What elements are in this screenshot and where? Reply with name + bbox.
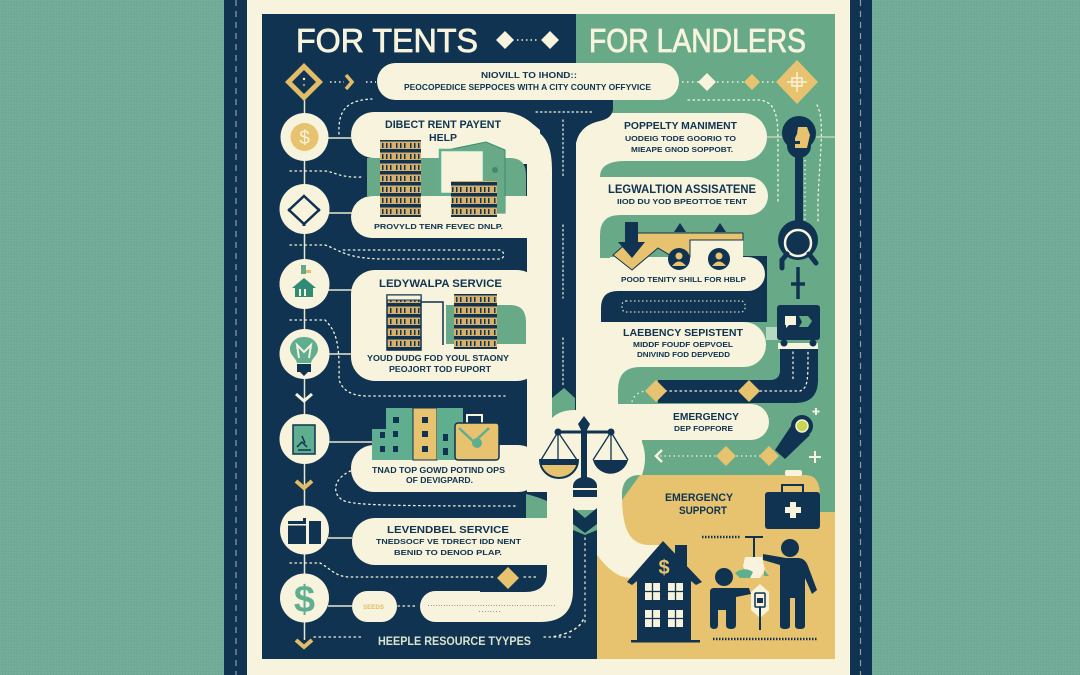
icon: aid handover <box>735 537 769 578</box>
gold zigzag <box>613 233 743 270</box>
icon: green house <box>280 259 330 309</box>
card: direct rent payment help: HELP <box>429 132 457 144</box>
banner: intro: PEOCOPEDICE SEPPOCES WITH A CITY COUNTY OFFYVICE <box>404 82 651 92</box>
icon: green dollar <box>280 574 329 622</box>
heading: for tenants: FOR TENTS <box>296 22 478 59</box>
card: tenant guidance text: TNAD TOP GOWD POTIND OPS <box>372 466 506 475</box>
coin stack right <box>454 294 497 349</box>
banner: intro: NIOVILL TO IHOND:: <box>481 71 577 80</box>
dotted rails <box>688 100 821 222</box>
heading: emergency support: EMERGENCY <box>665 492 734 504</box>
stack connector <box>421 302 443 345</box>
illustration lower pill <box>353 196 527 238</box>
arrow: top chevron with dots <box>330 75 376 89</box>
card: legal aid service: PEOJORT TOD FUPORT <box>389 365 491 374</box>
illustration: buildings and briefcase <box>372 408 499 460</box>
heading: for landlords: FOR LANDLERS <box>589 22 806 59</box>
icon: dollar coin <box>280 113 328 161</box>
timeline spine <box>304 100 306 640</box>
dotted frame in navy band <box>622 301 745 312</box>
center arrow second <box>552 208 576 305</box>
coin stack left <box>387 295 421 350</box>
panel: for tenants <box>262 14 576 659</box>
card: legal aid service <box>367 278 526 374</box>
arrow down <box>618 222 645 258</box>
cross pin <box>791 267 805 299</box>
magnifier icon <box>778 220 818 268</box>
card: agency assistant <box>623 327 744 359</box>
icon: diamond frame <box>280 184 330 234</box>
card: direct rent payment help: PROVYLD TENR FEVEC DNLP. <box>374 222 503 231</box>
right navy border strip <box>850 0 872 675</box>
icon: sparkles <box>809 408 821 463</box>
arrow: dotted left with diamonds <box>656 446 779 466</box>
heading: emergency support: SUPPORT <box>679 505 727 517</box>
card: property management <box>624 120 738 154</box>
card: property management: POPPELTY MANIMENT <box>624 120 738 132</box>
icon: gold diamond badge <box>285 63 323 101</box>
card: tenant help illustration: POOD TENITY SHILL FOR HBLP <box>621 275 746 284</box>
landlord icon tower <box>688 100 835 340</box>
pockets between roads <box>400 161 770 592</box>
people badges <box>668 248 730 270</box>
pill base <box>610 257 765 291</box>
arrow: cream chevron <box>296 394 312 401</box>
arrow: gold chevron one <box>296 481 312 488</box>
card: emergency <box>673 411 739 433</box>
scales of justice <box>540 416 628 497</box>
illustration green backing <box>367 158 526 202</box>
icon: light bulb <box>280 329 330 379</box>
card: legal aid level service <box>376 524 521 557</box>
chat box icon <box>777 305 820 340</box>
icon: house: $ <box>658 557 670 579</box>
card: legal aid level service: LEVENDBEL SERVICE <box>387 524 509 536</box>
center dotted guide lines <box>536 112 592 385</box>
icon: key tag <box>775 415 813 459</box>
card: property management: MIEAPE GNOD SOPPOBT. <box>631 145 733 154</box>
card: agency assistant: MIDDF FOUDF OEPVOEL <box>633 340 733 349</box>
panel: for landlords <box>576 14 835 659</box>
card: direct rent payment help: DIBECT RENT PAYENT <box>385 119 501 131</box>
coin stack short <box>451 181 497 217</box>
long pill text: ........ <box>479 608 500 613</box>
arrow: gold chevron two <box>296 640 312 647</box>
card: agency assistant: LAEBENCY SEPISTENT <box>623 327 744 339</box>
coin stack tall <box>380 140 421 217</box>
cream cut-out <box>690 240 743 258</box>
icon: folder <box>280 506 329 554</box>
card: emergency: DEP FOPFORE <box>674 424 733 433</box>
card: tenant help illustration <box>610 222 765 291</box>
left dotted paths <box>290 99 572 637</box>
navy road <box>632 340 818 403</box>
center arrow top <box>520 100 613 188</box>
card: legislation assistance: IIOD DU YOD BPEOTTOE TENT <box>617 197 747 206</box>
landlord top diamonds <box>682 60 818 104</box>
panel: emergency gold area <box>597 475 835 659</box>
card: legal aid service: YOUD DUDG FOD YOUL STAONY <box>367 354 510 363</box>
long pill text <box>428 602 555 613</box>
small pill <box>352 591 397 622</box>
icon: adult helping <box>763 539 817 629</box>
card: direct rent payment help <box>353 119 527 238</box>
pale green patch <box>766 327 780 340</box>
center arrow bottom <box>552 508 597 659</box>
cream road network <box>351 112 769 622</box>
footer label: HEEPLE RESOURCE TYYPES <box>378 634 531 648</box>
timeline connectors <box>328 138 372 606</box>
icon: dollar coin: $ <box>299 128 310 149</box>
illustration green block <box>446 305 526 344</box>
banner: intro <box>377 63 679 100</box>
card: property management: UODEIG TODE GOORIO TO <box>625 134 736 143</box>
gold diamond on road <box>497 567 519 589</box>
card: legal aid level service: TNEDSOCF VE TDRECT IDD NENT <box>376 537 521 546</box>
card: agency assistant: DNIVIND FOD DEPVEDD <box>637 350 731 359</box>
heading: emergency support <box>665 492 734 517</box>
illustration folder <box>440 142 505 213</box>
icon: sign <box>751 584 769 630</box>
lock icon <box>782 116 816 158</box>
card: legislation assistance <box>608 182 756 206</box>
card: tenant guidance text: OF DEVIGPARD. <box>406 476 473 485</box>
icon: first aid kit <box>765 470 820 529</box>
card: tenant guidance text <box>372 466 506 485</box>
long pill text: ................................................. <box>428 602 555 607</box>
dotted rulers <box>702 537 817 639</box>
header diamonds <box>496 31 559 49</box>
rod <box>795 155 803 225</box>
card: legislation assistance: LEGWALTION ASSISATENE <box>608 182 756 196</box>
card: emergency: EMERGENCY <box>673 411 739 423</box>
card: legal aid level service: BENID TO DENOD PLAP. <box>394 548 502 557</box>
card: legal aid service: LEDYWALPA SERVICE <box>379 278 502 290</box>
small pill: SEEDS <box>363 605 384 611</box>
left navy border strip <box>224 0 247 675</box>
icon: document <box>280 414 330 464</box>
center arrow third <box>552 325 575 418</box>
icon: green dollar: $ <box>294 579 315 621</box>
icon: child <box>710 568 751 629</box>
icon: house <box>627 541 702 642</box>
